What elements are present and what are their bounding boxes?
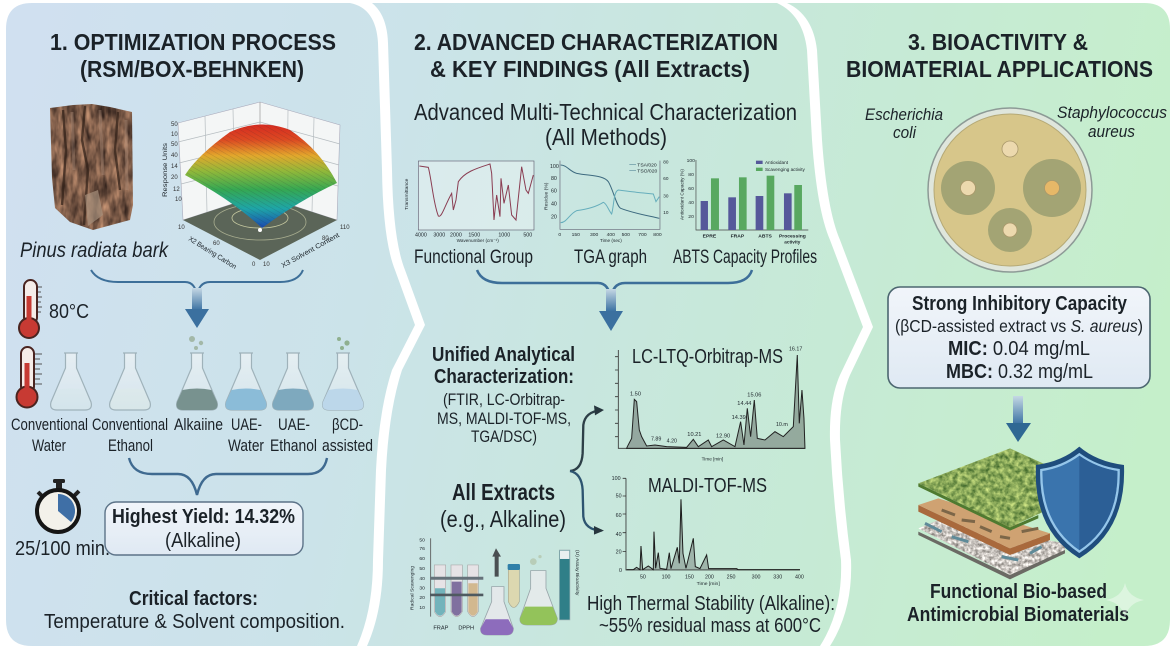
illustration: antioxidant assay tubes and flasks: 50 <box>419 566 425 572</box>
flask: conventional ethanol <box>110 353 150 410</box>
heading: characterization: 2. ADVANCED CHARACTERIZATION <box>414 29 778 55</box>
text: thermal stability <box>587 593 835 637</box>
chart: TGA graph: 300 <box>590 232 599 238</box>
text: unified analytical characterization: TGA/DSC) <box>471 427 537 446</box>
chart: LC-LTQ-Orbitrap-MS: 14.39 <box>732 415 746 421</box>
heading: bioactivity: 3. BIOACTIVITY & <box>908 29 1088 55</box>
chart: MALDI-TOF-MS: 200 <box>705 574 714 580</box>
chart: 3D response surface: 40 <box>171 153 178 159</box>
chart: TGA graph: 150 <box>572 232 580 238</box>
text: unified analytical characterization: MS, MALDI-TOF-MS, <box>437 409 571 428</box>
chart: capacity bars: Processing <box>779 234 806 240</box>
chart: MALDI-TOF-MS: 20 <box>616 550 622 556</box>
illustration: antioxidant assay tubes and flasks: 50 <box>419 538 425 544</box>
text: functional biomaterials: Functional Bio-based <box>930 581 1107 603</box>
chart: 3D response surface: 10 <box>175 197 182 203</box>
callout: inhibitory capacity: (βCD-assisted extract vs S. aureus) <box>895 316 1143 336</box>
text: thermal stability: High Thermal Stability (Alkaline): <box>587 593 835 615</box>
arrow: bracket down to analysis <box>477 270 752 331</box>
callout: inhibitory capacity: MIC: 0.04 mg/mL <box>948 338 1090 360</box>
flask labels: UAE- <box>231 416 262 434</box>
illustration: antioxidant assay tubes and flasks: FRAP <box>433 625 449 631</box>
illustration: antioxidant assay tubes and flasks: 40 <box>419 576 425 582</box>
chart: 3D response surface: 10 <box>178 225 185 231</box>
arrow: bracket down <box>91 270 303 328</box>
label: time: 25/100 min. <box>15 538 110 560</box>
chart: capacity bars: activity <box>784 239 801 244</box>
text: critical factors: Temperature & Solvent composition. <box>44 611 345 633</box>
chart: capacity bars: EPRE <box>703 234 717 240</box>
flask: UAE water <box>226 353 266 410</box>
illustration: antioxidant assay tubes and flasks: 76 <box>419 546 425 552</box>
chart: MALDI-TOF-MS: 60 <box>616 513 622 519</box>
caption: Pinus radiata bark: Pinus radiata bark <box>20 238 169 262</box>
text: unified analytical characterization: (FTIR, LC-Orbitrap- <box>443 390 565 409</box>
label: S. aureus <box>1057 103 1167 141</box>
chart: TGA graph: 400 <box>607 232 615 238</box>
chart: LC-LTQ-Orbitrap-MS: 4.20 <box>667 438 677 444</box>
text: critical factors <box>44 588 345 633</box>
chart: TGA graph: TSA/020 <box>637 163 657 169</box>
text: critical factors: Critical factors: <box>129 588 258 610</box>
flask: beta CD assisted <box>323 337 363 410</box>
heading: characterization: & KEY FINDINGS (All Extracts) <box>430 56 750 82</box>
chart: TGA graph: TSO/020 <box>637 169 657 175</box>
chart: 3D response surface: 12 <box>173 187 180 193</box>
callout: highest yield: (Alkaline) <box>165 530 241 552</box>
chart: MALDI-TOF-MS: 50 <box>616 494 622 500</box>
chart: capacity bars: 40 <box>688 200 694 206</box>
chart: FTIR functional group: 2000 <box>450 233 462 239</box>
chart: FTIR functional group: 4000 <box>415 233 427 239</box>
arrow: brace to yield <box>129 458 327 495</box>
chart: LC-LTQ-Orbitrap-MS <box>615 347 805 462</box>
chart: MALDI-TOF-MS: 150 <box>685 574 694 580</box>
chart: capacity bars <box>679 158 808 244</box>
chart: LC-LTQ-Orbitrap-MS: 10.m <box>776 422 788 428</box>
chart: MALDI-TOF-MS: Time [min] <box>697 581 720 587</box>
chart: capacity bars: Scavenging activity <box>765 167 805 172</box>
label: TGA graph: TGA graph <box>574 247 647 268</box>
flask labels: Water <box>228 437 264 455</box>
flask labels: βCD- <box>332 416 363 434</box>
icon: shield <box>1036 447 1124 558</box>
illustration: antioxidant assay tubes and flasks: Radical Scavenging <box>409 566 415 610</box>
arrow: down to biomaterials <box>1006 396 1031 442</box>
chart: TGA graph: 80 <box>551 176 557 182</box>
chart: TGA graph: 10 <box>663 210 669 215</box>
arrow: branching brace <box>570 405 604 535</box>
chart: 3D response surface: 50 <box>171 122 178 128</box>
chart: TGA graph: 20 <box>551 215 557 221</box>
text: functional biomaterials <box>907 581 1129 626</box>
label: MALDI-TOF-MS: MALDI-TOF-MS <box>648 474 767 497</box>
chart: LC-LTQ-Orbitrap-MS: 12.90 <box>716 433 730 439</box>
chart: FTIR functional group: 1000 <box>498 233 510 239</box>
chart: 3D response surface: X3 Solvent Content <box>281 232 341 270</box>
heading: optimization process <box>50 29 336 82</box>
illustration: petri dish <box>928 108 1092 272</box>
label: LC-LTQ-Orbitrap-MS: LC-LTQ-Orbitrap-MS <box>632 345 783 368</box>
label: functional group: Functional Group <box>414 247 533 268</box>
chart: 3D response surface: 10 <box>171 132 178 138</box>
text: all extracts <box>440 479 566 532</box>
chart: 3D response surface <box>162 102 350 271</box>
icon: thermometer <box>16 347 42 408</box>
chart: LC-LTQ-Orbitrap-MS: 7.89 <box>651 437 661 443</box>
flask labels: Conventional <box>11 416 88 434</box>
chart: capacity bars: Antioxidant <box>765 160 789 165</box>
flask: alkaline <box>177 336 217 410</box>
illustration: layered biomaterial <box>915 447 1068 579</box>
chart: 3D response surface: 50 <box>171 142 178 148</box>
chart: TGA graph: 100 <box>550 164 559 170</box>
chart: MALDI-TOF-MS: 0 <box>619 568 622 574</box>
chart: FTIR functional group: 1500 <box>468 233 480 239</box>
chart: FTIR functional group <box>404 161 534 243</box>
chart: LC-LTQ-Orbitrap-MS: Time [min] <box>702 457 723 462</box>
chart: MALDI-TOF-MS: 400 <box>795 574 804 580</box>
callout: highest yield <box>105 502 303 555</box>
heading: optimization process: (RSM/BOX-BEHNKEN) <box>80 56 304 82</box>
chart: MALDI-TOF-MS: 40 <box>616 532 622 538</box>
chart: 3D response surface: 0 <box>252 262 256 268</box>
flask labels: UAE- <box>278 416 310 434</box>
chart: capacity bars: 100 <box>687 158 695 164</box>
chart: 3D response surface: 80 <box>322 236 329 242</box>
chart: LC-LTQ-Orbitrap-MS: 15.06 <box>747 392 761 398</box>
callout: inhibitory capacity: Strong Inhibitory Capacity <box>912 293 1128 315</box>
flask labels: Ethanol <box>108 437 153 455</box>
chart: FTIR functional group: Wavenumber (cm⁻¹) <box>457 238 499 243</box>
chart: 3D response surface: 14 <box>171 164 178 170</box>
chart: FTIR functional group: 500 <box>523 233 532 239</box>
illustration: antioxidant assay tubes and flasks: 60 <box>419 556 425 562</box>
flask labels: Alkaiine <box>174 416 223 434</box>
label: E. coli <box>865 105 943 142</box>
chart: TGA graph <box>543 159 669 243</box>
text: unified analytical characterization: Characterization: <box>434 366 574 388</box>
chart: MALDI-TOF-MS <box>612 476 804 587</box>
chart: FTIR functional group: 3000 <box>433 233 445 239</box>
label: 80C: 80°C <box>49 301 89 323</box>
chart: MALDI-TOF-MS: 330 <box>773 574 782 580</box>
chart: 3D response surface: X2 Bearing Carbon <box>187 236 237 271</box>
chart: capacity bars: Antioxidant Capacity (%) <box>679 169 684 220</box>
flask labels <box>11 416 373 455</box>
illustration: antioxidant assay tubes and flasks: 20 <box>419 595 425 601</box>
label: ABTS capacity profiles: ABTS Capacity Profiles <box>673 247 817 268</box>
chart: MALDI-TOF-MS: 300 <box>752 574 761 580</box>
text: unified analytical characterization: Unified Analytical <box>432 344 575 366</box>
heading: bioactivity <box>846 29 1153 82</box>
heading: characterization <box>414 29 778 82</box>
text: unified analytical characterization <box>432 344 575 446</box>
chart: MALDI-TOF-MS: 100 <box>612 476 621 482</box>
chart: capacity bars: FRAP <box>731 234 745 240</box>
flask labels: Ethanol <box>270 437 317 455</box>
subheading: multi-technical <box>414 99 797 150</box>
chart: capacity bars: 60 <box>688 186 694 192</box>
chart: TGA graph: Residue (%) <box>543 182 549 210</box>
chart: 3D response surface: 60 <box>213 241 220 247</box>
illustration: antioxidant assay tubes and flasks: 10 <box>419 605 425 611</box>
illustration: antioxidant assay tubes and flasks: (U) Assay Bioactivity <box>574 550 580 596</box>
heading: optimization process: 1. OPTIMIZATION PROCESS <box>50 29 336 55</box>
panel: characterization <box>367 3 863 646</box>
chart: TGA graph: 60 <box>551 189 557 195</box>
chart: 3D response surface: 110 <box>340 225 350 231</box>
chart: TGA graph: 40 <box>551 202 557 208</box>
chart: TGA graph: 500 <box>622 232 630 238</box>
illustration: antioxidant assay tubes and flasks <box>409 538 580 635</box>
subheading: multi-technical: Advanced Multi-Technical Characterization <box>414 99 797 125</box>
callout: inhibitory capacity <box>888 287 1150 388</box>
chart: TGA graph: 700 <box>638 232 647 238</box>
chart: MALDI-TOF-MS: 50 <box>640 574 646 580</box>
text: all extracts: All Extracts <box>452 479 555 505</box>
chart: LC-LTQ-Orbitrap-MS: 10.21 <box>687 432 701 438</box>
icon: sparkle <box>1106 583 1144 618</box>
chart: capacity bars: ABTS <box>758 234 773 240</box>
flask labels: assisted <box>322 437 373 455</box>
label: E. coli: Escherichia <box>865 105 943 124</box>
subheading: multi-technical: (All Methods) <box>545 124 667 150</box>
chart: capacity bars: 20 <box>688 214 694 220</box>
panel: bioactivity <box>787 3 1170 646</box>
illustration: antioxidant assay tubes and flasks: 30 <box>419 585 425 591</box>
chart: MALDI-TOF-MS: 250 <box>727 574 736 580</box>
chart: TGA graph: 30 <box>663 193 669 198</box>
label: E. coli: coli <box>893 123 917 142</box>
chart: TGA graph: 800 <box>653 232 662 238</box>
flask: conventional water <box>51 353 91 410</box>
chart: LC-LTQ-Orbitrap-MS: 1.50 <box>630 392 641 398</box>
callout: highest yield: Highest Yield: 14.32% <box>112 506 295 528</box>
chart: MALDI-TOF-MS: 100 <box>662 574 671 580</box>
icon: thermometer 80C <box>19 280 42 338</box>
panel: optimization process <box>6 3 415 646</box>
chart: TGA graph: 80 <box>663 159 669 164</box>
icon: stopwatch <box>37 479 79 532</box>
text: functional biomaterials: Antimicrobial Biomaterials <box>907 604 1129 626</box>
chart: 3D response surface: 20 <box>171 175 178 181</box>
label: S. aureus: aureus <box>1088 122 1135 141</box>
flask labels: Conventional <box>92 416 168 434</box>
chart: 3D response surface: Response Units <box>162 142 169 197</box>
chart: 3D response surface: 10 <box>263 262 270 268</box>
image: pine bark <box>48 102 136 232</box>
chart: capacity bars: 80 <box>688 172 694 178</box>
chart: FTIR functional group: Transmittance <box>404 178 410 210</box>
text: thermal stability: ~55% residual mass at 600°C <box>599 615 821 637</box>
chart: TGA graph: Time (sec) <box>600 238 622 243</box>
text: all extracts: (e.g., Alkaline) <box>440 506 566 532</box>
chart: LC-LTQ-Orbitrap-MS: 14.44 <box>737 401 751 407</box>
illustration: antioxidant assay tubes and flasks: DPPH <box>458 625 474 631</box>
callout: inhibitory capacity: MBC: 0.32 mg/mL <box>946 361 1093 383</box>
chart: TGA graph: 60 <box>663 176 669 181</box>
flask: UAE ethanol <box>273 353 313 410</box>
chart: LC-LTQ-Orbitrap-MS: 16.17 <box>789 347 802 353</box>
flask labels: Water <box>32 437 66 455</box>
chart: TGA graph: 0 <box>558 232 561 238</box>
